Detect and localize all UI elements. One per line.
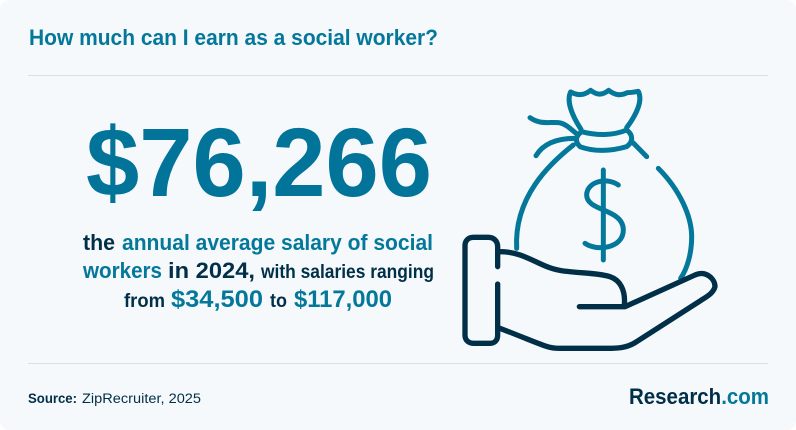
source note: Source: xyxy=(28,391,77,406)
description text block: to xyxy=(270,291,287,312)
source note: ZipRecruiter, 2025 xyxy=(82,391,201,406)
description text block xyxy=(82,230,434,313)
icon: money bag on open hand xyxy=(465,90,715,348)
icon: open hand xyxy=(465,237,715,348)
description text block: from xyxy=(124,291,165,312)
description text block: $117,000 xyxy=(294,286,392,313)
description text block: in 2024, xyxy=(168,258,255,283)
description text block: with salaries ranging xyxy=(260,262,434,283)
logo: Research.com: Research.com xyxy=(629,384,769,409)
description text block: the xyxy=(83,230,115,255)
description text block: workers xyxy=(82,258,162,283)
source note xyxy=(28,391,201,406)
icon: money bag xyxy=(517,90,692,278)
big salary number: $76,266 xyxy=(86,108,432,217)
description text block: $34,500 xyxy=(171,286,263,313)
title: How much can I earn as a social worker? xyxy=(29,25,438,50)
description text block: annual average salary of social xyxy=(122,230,433,255)
